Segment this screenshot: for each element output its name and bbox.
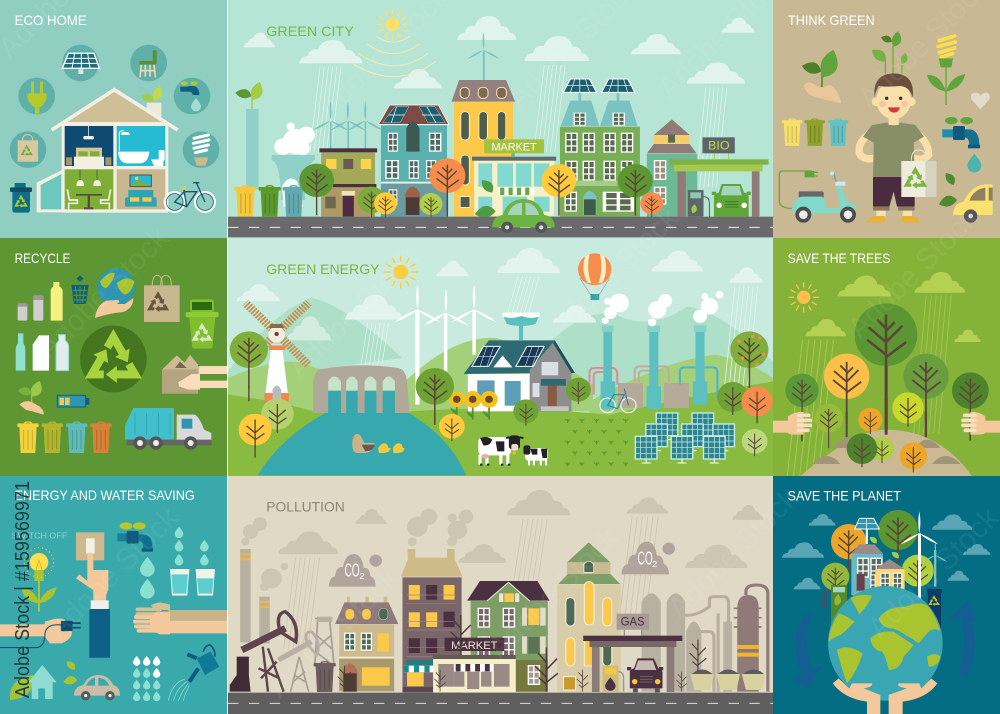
icon: solar panel (62, 45, 99, 81)
room: bedroom (65, 126, 113, 166)
watermark text: Adobe Stock (42, 501, 186, 645)
ducks (351, 434, 405, 453)
icon: bulb plant (927, 36, 965, 105)
panel: green energy (228, 238, 773, 476)
clouds (782, 514, 991, 589)
icon: cans and bottles (16, 282, 69, 371)
hot air balloon (578, 253, 611, 300)
panel: energy and water saving (0, 476, 227, 714)
icon: lime leaf (10, 675, 33, 700)
hand right (963, 412, 1000, 435)
building: teal house with solar roof (379, 105, 449, 217)
trees (785, 303, 989, 472)
icon: plug (18, 78, 55, 114)
hands holding globe (833, 678, 937, 714)
icon: washing hands (135, 602, 227, 634)
panel: eco home (0, 0, 227, 238)
fuel pump (825, 585, 847, 627)
room: living room (117, 169, 165, 209)
watermark text: Adobe Stock (282, 241, 426, 385)
clouds (237, 248, 763, 340)
icon: watering can (168, 645, 219, 701)
bio sign: BIO (708, 139, 730, 153)
watermark text: Adobe Stock (662, 481, 806, 625)
co2 cloud right: 2 (652, 559, 657, 569)
panel: recycle (0, 238, 227, 476)
rain (310, 65, 727, 187)
market sign: MARKET (451, 640, 498, 652)
building: market (472, 139, 556, 219)
trunks to ground (801, 365, 971, 441)
gas sign: GAS (621, 615, 644, 629)
icon: hand pressing switch (76, 532, 110, 658)
recycling bin (927, 589, 942, 628)
co2 cloud right (621, 542, 675, 574)
heading: eco home: ECO HOME (15, 12, 87, 28)
stock id vertical text: Adobe Stock | #159569971 (12, 481, 34, 698)
gas station (669, 137, 769, 217)
building: purple-grey tall house (401, 549, 463, 692)
icon: sun (789, 283, 818, 312)
oil pumps (230, 612, 334, 692)
heading: pollution: POLLUTION (266, 500, 345, 516)
car: side view (492, 199, 555, 233)
icon: hand with sprout (801, 48, 845, 103)
trees (230, 331, 773, 458)
trees (299, 158, 663, 228)
character: boy with bag (859, 73, 936, 223)
road (228, 217, 773, 237)
co2 cloud left (329, 554, 382, 587)
building: olive house (319, 148, 377, 217)
watermark text: Adobe Stock (32, 221, 176, 365)
illustration: house cross-section (37, 90, 178, 213)
icons: three bins (782, 118, 848, 146)
icon: water tap (174, 78, 210, 114)
icon: chair (130, 45, 167, 81)
icon: hand with sprout (17, 380, 46, 415)
chimney with sprout (235, 81, 268, 189)
sunflowers (449, 391, 498, 420)
panel: think green (773, 0, 1000, 238)
heading: energy and water saving: ENERGY AND WATER SAVING (15, 487, 195, 503)
icon: wire basket (71, 275, 89, 304)
icon: water drop (967, 154, 981, 172)
icon: light bulb plant (22, 548, 57, 612)
icon: hand with plug (0, 619, 81, 648)
icon: sun (384, 256, 417, 288)
building: beige house (335, 597, 398, 692)
water tower (503, 313, 540, 340)
solar panel array (635, 413, 734, 463)
watermark text: Adobe Stock (542, 201, 686, 345)
building: market (433, 638, 516, 692)
factory with chimneys (590, 291, 723, 410)
cows (478, 435, 548, 465)
dam (313, 365, 409, 414)
label: switch off: SWITCH OFF (12, 530, 67, 540)
co2 cloud left: 2 (359, 571, 364, 581)
panel: save the planet (773, 476, 1000, 714)
icon: green recycling bin (186, 299, 219, 349)
heading: green city: GREEN CITY (266, 24, 354, 40)
trees (821, 510, 934, 606)
coal carts (690, 669, 765, 690)
heading: green energy: GREEN ENERGY (266, 262, 380, 278)
building: yellow house (452, 80, 515, 217)
building: small house (647, 119, 697, 217)
watermark text: Adobe Stock (262, 561, 406, 705)
watermark text: Adobe Stock (842, 201, 986, 345)
icon: leaves (939, 171, 957, 207)
car: dark front view (627, 658, 663, 692)
hill (800, 430, 972, 476)
panel: pollution (228, 476, 773, 714)
smokestacks (240, 549, 270, 643)
icon: bicycle (165, 183, 215, 212)
rain (284, 517, 658, 649)
heading: save the trees: SAVE THE TREES (788, 250, 890, 266)
icon: small car (74, 675, 120, 700)
windmill (245, 303, 309, 402)
house with solar roof (464, 340, 575, 411)
hill mounds (813, 436, 961, 464)
icon: water tap with leaves (117, 522, 153, 552)
icon: house (28, 665, 57, 699)
room: dining (65, 169, 113, 209)
bicycle (600, 389, 636, 413)
icon: sun with rays (350, 10, 436, 77)
heading: save the planet: SAVE THE PLANET (788, 488, 901, 504)
rain (357, 276, 758, 399)
icon: recycling symbol (77, 326, 147, 393)
river (258, 413, 466, 475)
icon: green leaves (63, 659, 78, 686)
trash bin (314, 661, 336, 692)
globe (828, 586, 943, 701)
clouds and smoke (241, 490, 763, 591)
room: bathroom (117, 126, 165, 166)
icons: drop grid (133, 656, 160, 701)
clouds (805, 272, 981, 342)
smoke (602, 291, 723, 326)
co2 cloud right: CO (637, 549, 653, 569)
heading: think green: THINK GREEN (788, 12, 875, 28)
clouds (244, 16, 755, 88)
heading: recycle: RECYCLE (15, 250, 70, 266)
background hills (228, 297, 773, 425)
bare trees (338, 615, 706, 692)
icons: four waste bins (17, 421, 112, 453)
watermark text: Adobe Stock (482, 521, 626, 665)
wind turbines (900, 511, 948, 600)
houses (851, 535, 905, 595)
icon: hand holding earth (95, 268, 135, 318)
car: front view (712, 184, 751, 217)
building: cream house (557, 542, 621, 692)
rain (787, 295, 951, 478)
circular arrows (793, 600, 977, 688)
icon: sprouts above head (871, 31, 910, 73)
waste bins (234, 185, 305, 217)
icons: water glasses (170, 569, 215, 596)
icon: shopping bag (10, 131, 46, 168)
gas station (583, 614, 682, 692)
panel: save the trees (773, 238, 1000, 478)
solar panel on pole (855, 518, 879, 544)
wind turbines (312, 32, 500, 150)
building: green townhouse with solar panels (560, 79, 640, 217)
icon: garbage truck (125, 408, 212, 450)
road (228, 693, 773, 714)
icon: energy bulb (183, 131, 219, 168)
vegetable rows (565, 419, 628, 466)
cooling tower with steam (272, 123, 315, 207)
refinery (642, 585, 768, 692)
icon: green leaves on chimney (141, 85, 166, 119)
wind turbines (394, 285, 497, 405)
icon: yellow car (953, 184, 993, 223)
icon: paper bag (144, 275, 180, 322)
icon: battery (57, 395, 89, 407)
co2 cloud left: CO (344, 561, 360, 582)
icon: electric scooter (779, 171, 858, 223)
market sign: MARKET (491, 142, 537, 154)
icon: recycling bin (10, 183, 32, 213)
icons: water drops (140, 526, 209, 599)
hand left (773, 412, 810, 435)
ground (228, 381, 773, 476)
building: green house (467, 581, 550, 692)
icon: box held by hands (162, 355, 227, 394)
icon: heart (971, 93, 990, 109)
panel: green city (228, 0, 773, 238)
icon: tap with leaves (942, 117, 980, 148)
